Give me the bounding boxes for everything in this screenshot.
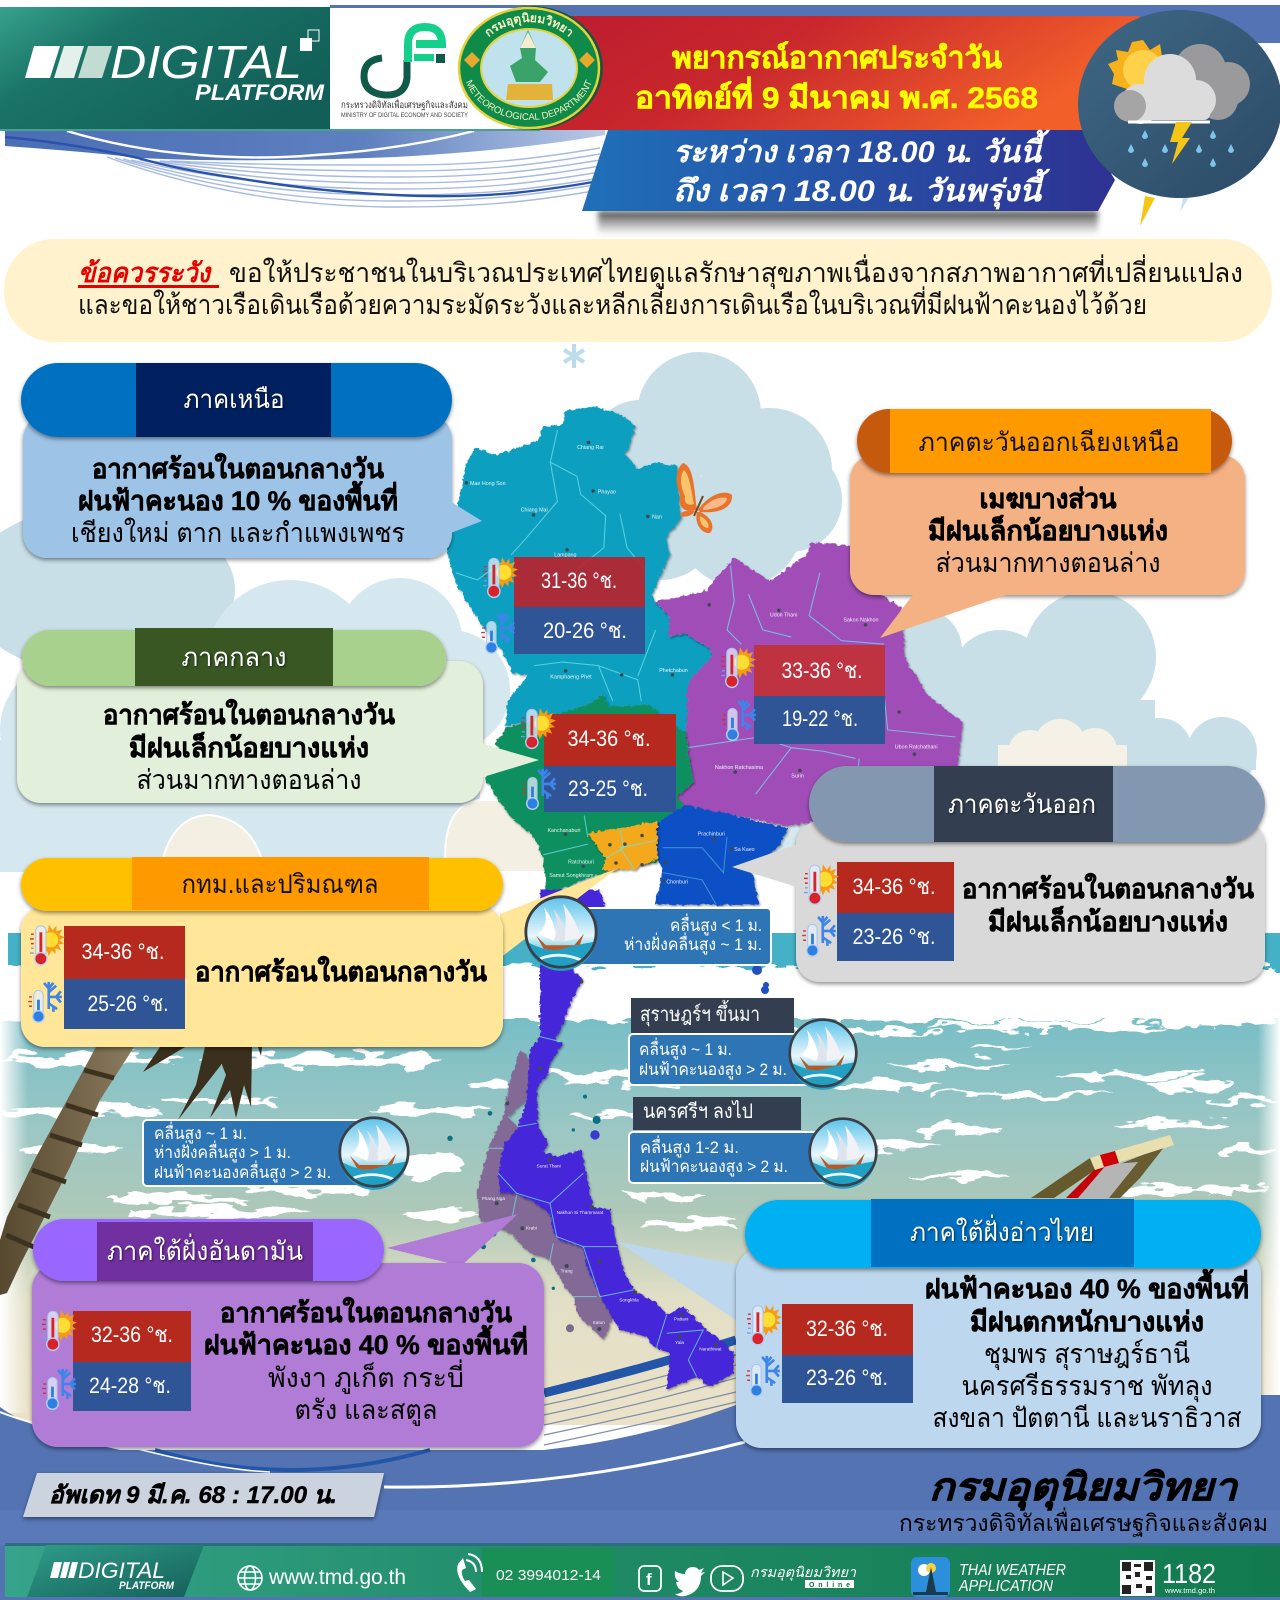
logo: Digital Platform: PLATFORM	[195, 80, 325, 105]
map region: north: Chiang Rai	[577, 445, 604, 451]
weather app: APPLICATION	[958, 1578, 1053, 1595]
central header: ภาคกลาง	[182, 642, 286, 672]
north temperature: 20-26 °ช.	[543, 618, 627, 643]
central forecast text	[103, 699, 396, 795]
east header	[809, 766, 1265, 842]
Andaman temperature: 32-36 °ช.	[91, 1322, 173, 1347]
Gulf header: ภาคใต้ฝั่งอ่าวไทย	[910, 1214, 1094, 1247]
update timestamp	[23, 1473, 384, 1517]
wave box: Nakhon Si Thammarat south: คลื่นสูง 1-2 ม.	[640, 1135, 739, 1158]
QR and hotline: www.tmd.go.th	[1164, 1588, 1215, 1595]
logo: meteorological department seal: METEOROLOGICAL DEPARTMENT	[466, 79, 592, 120]
footer logo	[27, 1545, 204, 1597]
panel: central	[17, 628, 539, 803]
Andaman forecast text	[204, 1297, 528, 1426]
map region: north: Chiang Mai	[521, 507, 548, 513]
wave box: upper gulf	[526, 897, 771, 971]
icon: ship	[526, 897, 596, 971]
map region: south Gulf: Prachuap Khiri Khan	[585, 979, 628, 984]
central forecast text: มีฝนเล็กน้อยบางแห่ง	[129, 730, 369, 763]
east temperature: 34-36 °ช.	[852, 874, 936, 899]
northeast forecast text: มีฝนเล็กน้อยบางแห่ง	[928, 513, 1168, 546]
warning text	[78, 254, 1243, 320]
time line 2: ถึง เวลา 18.00 น. วันพรุ่งนี้	[673, 168, 1051, 210]
east forecast text: อากาศร้อนในตอนกลางวัน	[962, 873, 1255, 904]
map of Thailand	[447, 407, 963, 1390]
wave box: Andaman: ห่างฝั่งคลื่นสูง > 1 ม.	[154, 1140, 291, 1163]
central header	[22, 628, 446, 686]
map region: north	[447, 407, 713, 733]
weather app	[911, 1557, 1066, 1597]
icon: small snowflake	[564, 344, 584, 368]
Gulf forecast text: มีฝนตกหนักบางแห่ง	[970, 1307, 1204, 1337]
north forecast text: อากาศร้อนในตอนกลางวัน	[92, 453, 385, 484]
map region: north: Kamphaeng Phet	[550, 674, 592, 680]
map region: south Gulf: Nakhon Si Thammarat	[557, 1210, 604, 1215]
icon: ship	[810, 1119, 876, 1189]
Gulf forecast text: นครศรีธรรมราช พัทลุง	[962, 1371, 1212, 1403]
map region: south Gulf: Pattani	[674, 1317, 688, 1322]
Andaman forecast text: พังงา ภูเก็ต กระบี่	[268, 1359, 464, 1394]
north header	[21, 363, 452, 437]
map region: north: Phetchabun	[659, 668, 688, 674]
Bangkok temperature	[28, 925, 185, 1029]
map region: south Andaman: Trang	[561, 1269, 573, 1274]
map region: east: Sa Kaeo	[734, 847, 755, 853]
header: date banner	[530, 16, 1140, 130]
east header: ภาคตะวันออก	[948, 789, 1096, 819]
central temperature: 23-25 °ช.	[568, 776, 648, 801]
Gulf header	[745, 1199, 1261, 1268]
Gulf forecast text	[925, 1268, 1249, 1433]
map: southern region	[447, 890, 735, 1390]
panel: south Gulf of Thailand	[618, 1199, 1261, 1448]
map region: south Andaman: Satun	[593, 1320, 605, 1325]
phone	[457, 1548, 614, 1597]
northeast temperature	[721, 645, 885, 744]
Andaman forecast text: อากาศร้อนในตอนกลางวัน	[220, 1297, 513, 1328]
panel: warning notice	[4, 239, 1272, 342]
map region: south Gulf: Yala	[675, 1340, 684, 1345]
east forecast text: มีฝนเล็กน้อยบางแห่ง	[988, 904, 1228, 937]
website: www.tmd.go.th	[268, 1566, 406, 1589]
map region: Bangkok	[588, 821, 657, 871]
social icons: กรมอุตุนิยมวิทยา	[750, 1564, 857, 1581]
map region: east	[656, 805, 788, 905]
map region: south Gulf: Narathiwat	[699, 1347, 722, 1352]
map region: central	[484, 694, 693, 894]
wave box: Nakhon Si Thammarat south: ฝนฟ้าคะนองสูง > 2 ม.	[640, 1157, 788, 1177]
wave box: Surat Thani north	[629, 998, 856, 1090]
icon: ship	[340, 1118, 408, 1190]
Andaman temperature: 24-28 °ช.	[89, 1373, 171, 1398]
wave box: Andaman: คลื่นสูง ~ 1 ม.	[154, 1121, 247, 1144]
north header: ภาคเหนือ	[184, 384, 284, 414]
wave box: Surat Thani north: คลื่นสูง ~ 1 ม.	[639, 1037, 732, 1060]
wave box: Nakhon Si Thammarat south	[629, 1097, 876, 1189]
northeast header	[857, 409, 1232, 473]
wave box: Surat Thani north: สุราษฎร์ฯ ขึ้นมา	[640, 1000, 760, 1027]
logo: meteorological department seal	[458, 6, 603, 130]
icon: storm weather	[1078, 10, 1280, 226]
northeast temperature: 19-22 °ช.	[782, 706, 858, 731]
map: northern and central regions	[447, 407, 963, 905]
warning text: และขอให้ชาวเรือเดินเรือด้วยความระมัดระวังและหลีกเลี่ยงการเดินเรือในบริเวณที่มีฝนฟ้าคะนองไว้ด้วย	[78, 286, 1147, 320]
panel: northeast	[850, 409, 1245, 638]
Gulf forecast text: ชุมพร สุราษฎร์ธานี	[984, 1338, 1190, 1371]
northeast forecast text: ส่วนมากทางตอนล่าง	[936, 548, 1160, 578]
Andaman forecast text: ฝนฟ้าคะนอง 40 % ของพื้นที่	[204, 1324, 528, 1360]
QR and hotline	[1120, 1558, 1216, 1596]
footer bar	[5, 1543, 1280, 1597]
map region: central: Ratchaburi	[568, 859, 594, 865]
department name	[899, 1467, 1268, 1537]
icon: butterfly	[677, 463, 732, 533]
map region: south Gulf: Songkhla	[619, 1297, 639, 1302]
north temperature	[481, 557, 645, 654]
map region: northeast: Ubon Ratchathani	[895, 744, 938, 750]
map region: north: Phayao	[598, 490, 616, 496]
north forecast text: ฝนฟ้าคะนอง 10 % ของพื้นที่	[78, 480, 398, 516]
logo: Digital Platform	[25, 30, 325, 105]
beach chair	[1031, 1135, 1174, 1198]
Andaman forecast text: ตรัง และสตูล	[294, 1395, 438, 1426]
Andaman header: ภาคใต้ฝั่งอันดามัน	[107, 1233, 303, 1266]
QR and hotline: 1182	[1162, 1558, 1216, 1589]
Andaman header	[33, 1219, 384, 1281]
warning text: ขอให้ประชาชนในบริเวณประเทศไทยดูแลรักษาสุขภาพเนื่องจากสภาพอากาศที่เปลี่ยนแปลง	[229, 254, 1243, 290]
logo: ministry DE: กระทรวงดิจิทัลเพื่อเศรษฐกิจและสังคม	[341, 98, 468, 111]
map region: south Gulf	[498, 890, 735, 1390]
logo: ministry DE: MINISTRY OF DIGITAL ECONOMY AND SOCIETY	[341, 112, 469, 119]
map region: central: Samut Songkhram	[549, 873, 594, 879]
Gulf forecast text: สงขลา ปัตตานี และนราธิวาส	[932, 1403, 1242, 1433]
map region: south Andaman: Phang Nga	[482, 1196, 505, 1201]
north forecast text	[71, 453, 405, 548]
Gulf temperature: 32-36 °ช.	[806, 1316, 888, 1341]
social icons: Online	[809, 1582, 850, 1589]
wave box: Andaman: ฝนฟ้าคะนองคลื่นสูง > 2 ม.	[154, 1160, 331, 1183]
central temperature: 34-36 °ช.	[568, 726, 650, 751]
map region: east: Prachinburi	[698, 832, 725, 838]
wave box: Surat Thani north: ฝนฟ้าคะนองสูง > 2 ม.	[639, 1060, 787, 1080]
weather app: THAI WEATHER	[959, 1562, 1066, 1579]
logo: Digital Platform: DIGITAL	[110, 36, 302, 88]
Gulf forecast text: ฝนฟ้าคะนอง 40 % ของพื้นที่	[925, 1268, 1249, 1304]
map region: south Andaman	[477, 1050, 613, 1340]
bottom blue wave	[0, 1340, 1280, 1600]
Bangkok temperature: 34-36 °ช.	[82, 939, 164, 964]
header: time range banner	[582, 129, 1115, 211]
Andaman temperature	[42, 1310, 191, 1411]
palm tree	[0, 1047, 262, 1295]
header date: อาทิตย์ที่ 9 มีนาคม พ.ศ. 2568	[635, 76, 1038, 115]
logo: meteorological department seal: กรมอุตุนิยมวิทยา	[486, 12, 572, 37]
wave box: upper gulf: คลื่นสูง < 1 ม.	[670, 913, 762, 936]
map region: east: Chonburi	[666, 879, 688, 885]
wave box: upper gulf: ห่างฝั่งคลื่นสูง ~ 1 ม.	[624, 932, 762, 955]
header: logo panel	[0, 6, 603, 131]
north forecast text: เชียงใหม่ ตาก และกำแพงเพชร	[71, 517, 405, 548]
east temperature: 23-26 °ช.	[852, 924, 936, 949]
header swoosh	[5, 5, 1280, 207]
social icons: f	[646, 1570, 652, 1589]
map region: northeast: Surin	[791, 774, 804, 780]
east temperature	[802, 862, 954, 961]
footer logo: DIGITAL	[78, 1558, 165, 1583]
social icons	[639, 1564, 857, 1596]
shadow under time banner	[598, 211, 1098, 235]
panel: south Andaman	[32, 1214, 544, 1447]
map region: central: Kanchanaburi	[547, 828, 580, 834]
wave box: Nakhon Si Thammarat south: นครศรีฯ ลงไป	[643, 1100, 753, 1123]
map region: north: Mae Hong Son	[470, 481, 506, 487]
wave box: Andaman	[143, 1118, 408, 1190]
Gulf temperature	[746, 1304, 913, 1403]
Bangkok header: กทม.และปริมณฑล	[182, 869, 378, 899]
icon: ship	[790, 1020, 856, 1090]
Bangkok temperature: 25-26 °ช.	[88, 991, 168, 1016]
map region: northeast	[654, 542, 963, 826]
north temperature: 31-36 °ช.	[541, 568, 617, 593]
department name: กระทรวงดิจิทัลเพื่อเศรษฐกิจและสังคม	[899, 1507, 1268, 1537]
department name: กรมอุตุนิยมวิทยา	[929, 1467, 1239, 1511]
Bangkok forecast text: อากาศร้อนในตอนกลางวัน	[195, 956, 488, 987]
phone: 02 3994012-14	[496, 1567, 601, 1584]
central forecast text: อากาศร้อนในตอนกลางวัน	[103, 699, 396, 730]
map region: north: Nan	[652, 515, 662, 521]
central temperature	[521, 708, 676, 812]
panel: Bangkok	[21, 857, 616, 1047]
map region: south Gulf: Surat Thani	[537, 1163, 561, 1168]
logo: ministry DE	[341, 27, 469, 119]
footer logo: PLATFORM	[119, 1580, 175, 1592]
header title: พยากรณ์อากาศประจำวัน	[672, 41, 1002, 75]
central forecast text: ส่วนมากทางตอนล่าง	[136, 765, 362, 795]
update timestamp: อัพเดท 9 มี.ค. 68 : 17.00 น.	[49, 1482, 337, 1509]
panel: east	[732, 766, 1265, 982]
northeast temperature: 33-36 °ช.	[782, 658, 862, 683]
map region: north: Lampang	[554, 553, 577, 559]
Bangkok header	[21, 857, 503, 911]
warning label: ข้อควรระวัง	[78, 258, 213, 288]
map region: south Andaman: Krabi	[526, 1225, 537, 1230]
map region: northeast: Sakon Nakhon	[843, 617, 878, 623]
northeast forecast text: เมฆบางส่วน	[980, 484, 1117, 514]
map region: northeast: Nakhon Ratchasima	[715, 765, 763, 771]
east forecast text	[962, 873, 1255, 937]
northeast header: ภาคตะวันออกเฉียงเหนือ	[918, 427, 1180, 457]
Gulf temperature: 23-26 °ช.	[806, 1365, 888, 1390]
map region: northeast: Udon Thani	[770, 612, 797, 618]
time line 1: ระหว่าง เวลา 18.00 น. วันนี้	[673, 129, 1050, 169]
northeast forecast text	[928, 484, 1168, 578]
panel: north	[21, 363, 482, 558]
